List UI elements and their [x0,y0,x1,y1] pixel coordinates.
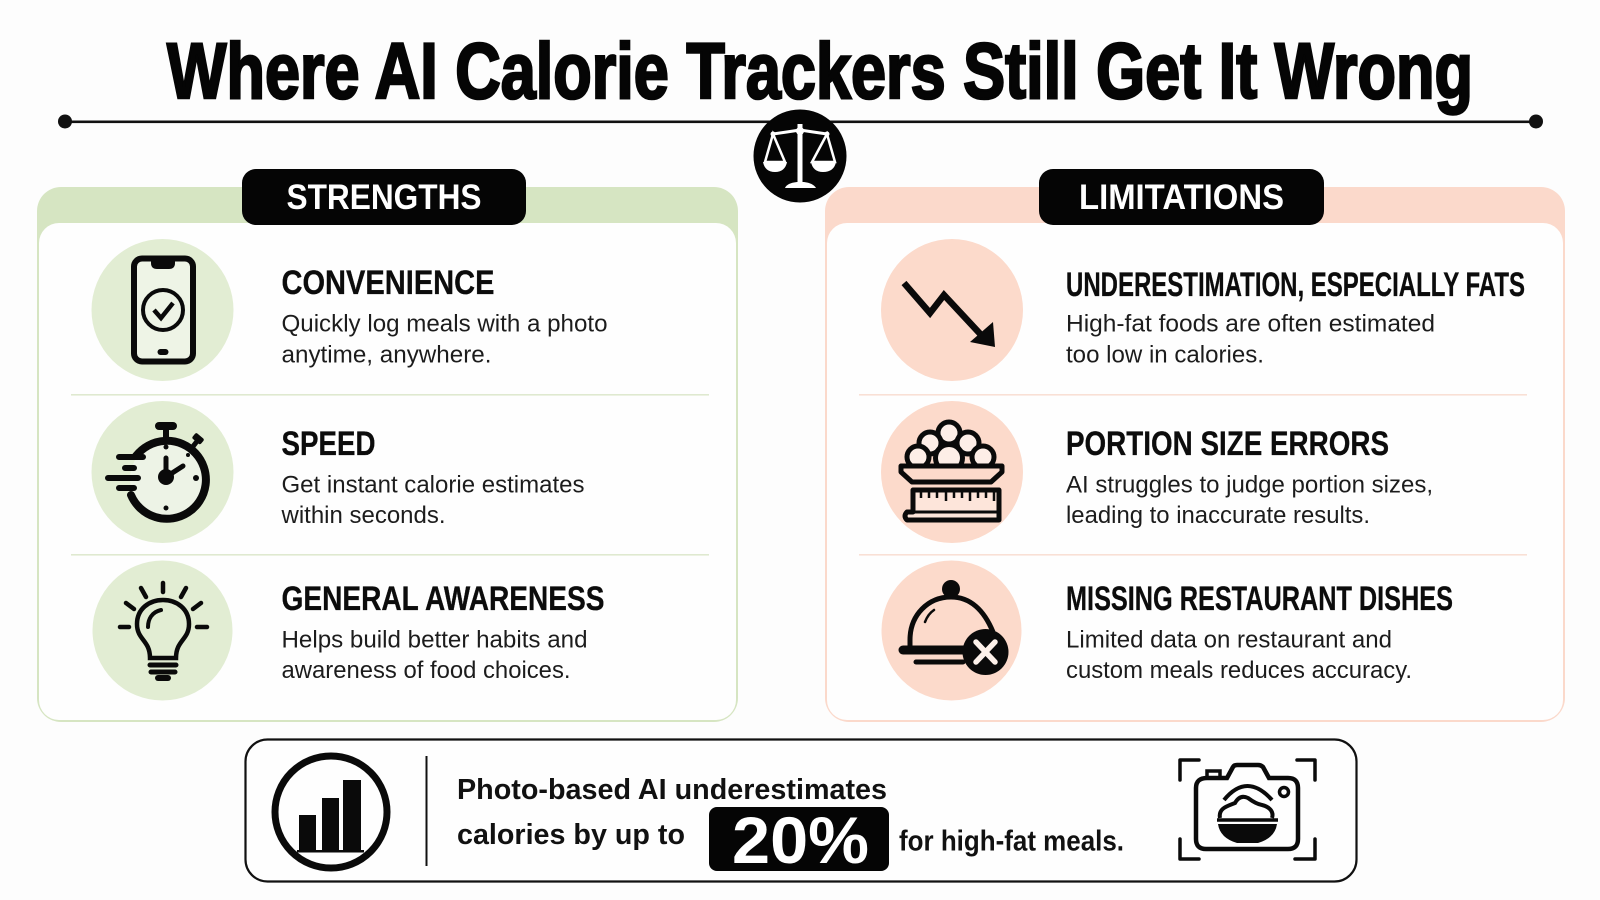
text: convenience: CONVENIENCE [282,264,494,302]
text: speed: Get instant calorie estimates [282,472,584,498]
icon: light bulb [92,560,232,700]
text: convenience: anytime, anywhere. [282,342,492,368]
text: portion size errors: AI struggles to judge portion sizes, [1066,472,1433,498]
icon: camera framing a food bowl [1180,760,1315,859]
heading: limitations [1039,169,1324,225]
text: speed: within seconds. [281,502,446,529]
stat text: Photo-based AI underestimates [457,774,887,806]
item: missing restaurant dishes [882,560,1453,700]
text: general awareness: awareness of food choices. [282,657,570,684]
text: underestimation [1066,266,1525,368]
icon: falling arrow [881,239,1023,381]
text: missing restaurant dishes: custom meals reduces accuracy. [1066,657,1412,684]
text: portion size errors [1066,425,1433,529]
text: convenience [282,264,608,368]
icon: balance scales [754,110,846,202]
item: portion size errors [881,401,1433,543]
item: general awareness [92,560,604,700]
icon: phone with check mark [92,239,234,381]
text: speed: SPEED [282,425,376,463]
panel background: strengths [37,187,738,722]
icon: stopwatch [92,401,234,543]
heading: strengths [242,169,526,225]
text: missing restaurant dishes: MISSING RESTAURANT DISHES [1066,580,1453,618]
stat text [457,774,1124,877]
text: underestimation: too low in calories. [1066,342,1264,368]
heading: limitations: LIMITATIONS [1079,178,1284,217]
text: missing restaurant dishes: Limited data on restaurant and [1066,626,1392,654]
heading: strengths: STRENGTHS [286,178,482,217]
item: convenience [92,239,608,381]
text: missing restaurant dishes [1066,580,1453,684]
text: underestimation: High-fat foods are often estimated [1066,310,1435,338]
text: convenience: Quickly log meals with a photo [282,310,608,338]
text: portion size errors: leading to inaccurate results. [1066,502,1370,529]
panel background: limitations [825,187,1565,722]
panel: limitations [825,169,1565,722]
text: general awareness: Helps build better habits and [282,626,588,654]
text: portion size errors: PORTION SIZE ERRORS [1066,425,1389,463]
item: speed [92,401,584,543]
stat text: for high-fat meals. [899,826,1124,858]
icon: bar chart in circle [275,756,387,868]
icon: cloche with x [882,560,1022,700]
icon: food bowl and ruler [881,401,1023,543]
callout: 20% stat [246,740,1356,882]
panel: strengths [37,169,738,722]
text: general awareness [282,580,604,684]
text: general awareness: GENERAL AWARENESS [282,580,604,618]
item: underestimation [881,239,1525,381]
stat badge: 20%: 20% [732,803,869,877]
text: speed [281,425,584,529]
title rule with end dots [58,114,1543,128]
stat text: calories by up to [457,819,685,851]
